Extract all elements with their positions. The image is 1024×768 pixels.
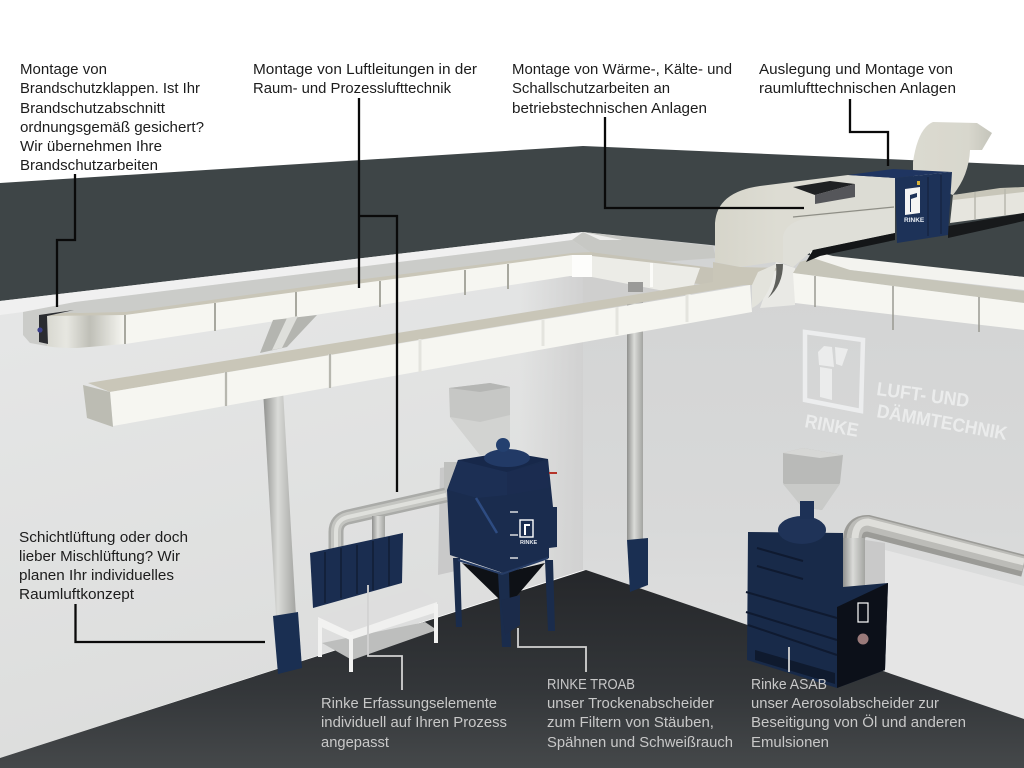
wall slogan line 1: LUFT- UND (875, 379, 970, 412)
text: Rinke ASAB: Beseitigung von Öl und anderen (751, 713, 966, 731)
text: Rinke ASAB (751, 676, 966, 751)
wall slogan line 2: DÄMMTECHNIK (875, 401, 1009, 445)
exhaust pipe (854, 522, 1024, 566)
text: Erfassungselemente: angepasst (321, 734, 390, 751)
text: Brandschutz: Montage von (20, 61, 107, 78)
text: Raumluftkonzept: lieber Mischlüftung? Wir (19, 548, 180, 565)
duct along right wall (793, 250, 1024, 332)
gauge (858, 634, 868, 644)
RINKE wall text: RINKE (803, 411, 860, 442)
TROAB dry separator: RINKE (520, 540, 537, 546)
text: RINKE TROAB (547, 676, 733, 751)
collection bin (501, 595, 520, 635)
connection box (444, 462, 460, 492)
wall piece beside elbow (760, 262, 795, 308)
fire damper (37, 310, 74, 344)
big duct elbow (713, 175, 895, 308)
wall top rim right (572, 232, 716, 262)
cabinet (447, 459, 557, 573)
text: Luftleitungen: Montage von Luftleitungen in der (253, 61, 477, 78)
corner shade left of corner (520, 275, 583, 590)
cabinet panels (746, 548, 837, 655)
text: raumlufttechnische Anlagen: raumlufttechnischen Anlagen (759, 80, 956, 97)
legs (453, 558, 555, 647)
fan (778, 516, 826, 544)
vertical pipe section (843, 538, 865, 596)
upper duct (37, 252, 592, 348)
text: Erfassungselemente (321, 695, 507, 751)
wall pipe and stand left (260, 315, 317, 674)
text: RINKE TROAB: Spähnen und Schweißrauch (547, 734, 733, 751)
air handling unit: RINKE (904, 217, 925, 224)
shade under back duct (583, 275, 690, 312)
text: Wärme-, Kälte- und Schallschutz (512, 61, 732, 117)
text: Luftleitungen (253, 61, 477, 97)
text: Brandschutz: Brandschutzklappen. Ist Ihr (20, 80, 200, 97)
side logo (858, 603, 868, 622)
text: Rinke ASAB: Emulsionen (751, 734, 829, 751)
logo mark (818, 346, 848, 400)
text: Erfassungselemente: individuell auf Ihren Prozess (321, 714, 507, 731)
text: Luftleitungen: Raum- und Prozesslufttechnik (253, 80, 451, 97)
text: Raumluftkonzept: Schichtlüftung oder doch (19, 529, 188, 546)
wall shadow of TROAB (438, 465, 460, 575)
bolts (510, 512, 518, 558)
ASAB hood (783, 448, 843, 510)
TROAB dry separator (444, 383, 557, 647)
fan (484, 449, 530, 467)
text: RINKE TROAB: RINKE TROAB (547, 676, 635, 693)
lower duct (83, 282, 752, 427)
wall shadow behind upper duct (23, 240, 590, 346)
wall pipe and stand right (627, 300, 648, 592)
rear duct run (948, 187, 1024, 238)
side face (837, 583, 888, 688)
leader lines (57, 98, 888, 642)
text: Raumluftkonzept: Raumluftkonzept (19, 586, 135, 603)
text: raumlufttechnische Anlagen (759, 61, 956, 97)
floor leader lines (368, 585, 789, 690)
air handling unit (848, 169, 952, 243)
ASAB aerosol separator (746, 448, 1024, 688)
door logo (520, 520, 533, 537)
text: Brandschutz: Brandschutzarbeiten (20, 157, 158, 174)
hopper (462, 563, 545, 600)
text: Wärme-, Kälte- und Schallschutz: Schallschutzarbeiten an (512, 80, 670, 97)
back duct along right wall corner (590, 252, 713, 296)
text: raumlufttechnische Anlagen: Auslegung und Montage von (759, 61, 953, 78)
lower gap (755, 650, 835, 684)
text: Brandschutz: Brandschutzabschnitt (20, 100, 166, 117)
cabinet (747, 532, 888, 688)
text: Brandschutz: ordnungsgemäß gesichert? (20, 119, 204, 136)
pipe wall shadow (865, 540, 885, 680)
text: Raumluftkonzept: planen Ihr individuelles (19, 567, 174, 584)
left wall (0, 232, 583, 758)
text: Brandschutz: Wir übernehmen Ihre (20, 138, 162, 155)
elbow lower transition (713, 262, 780, 285)
text: Rinke ASAB: Rinke ASAB (751, 676, 827, 693)
text: Rinke ASAB: unser Aerosolabscheider zur (751, 695, 939, 712)
vertical elbow (913, 122, 992, 195)
text: Erfassungselemente: Rinke Erfassungselemente (321, 695, 497, 712)
text: Wärme-, Kälte- und Schallschutz: betriebstechnischen Anlagen (512, 100, 707, 117)
floor (0, 570, 1024, 768)
wall lettering and logo (803, 332, 1009, 445)
logo frame (805, 332, 863, 411)
table (318, 588, 437, 672)
background: ceiling slab (0, 146, 1024, 320)
right wall (583, 232, 1024, 719)
text: Raumluftkonzept (19, 529, 188, 603)
rim highlight (583, 232, 622, 240)
pressure valve (549, 472, 557, 474)
text: RINKE TROAB: zum Filtern von Stäuben, (547, 714, 714, 731)
duct opening (793, 181, 855, 195)
capture panel (310, 533, 403, 608)
extraction pipe and capture panel (310, 495, 446, 672)
filter hood (449, 383, 510, 455)
wall lighter panel under pipe (885, 550, 1024, 719)
text: Wärme-, Kälte- und Schallschutz: Montage von Wärme-, Kälte- und (512, 61, 732, 78)
wall top rim left (0, 232, 583, 315)
text: Brandschutz (20, 61, 204, 174)
text: RINKE TROAB: unser Trockenabscheider (547, 695, 714, 712)
